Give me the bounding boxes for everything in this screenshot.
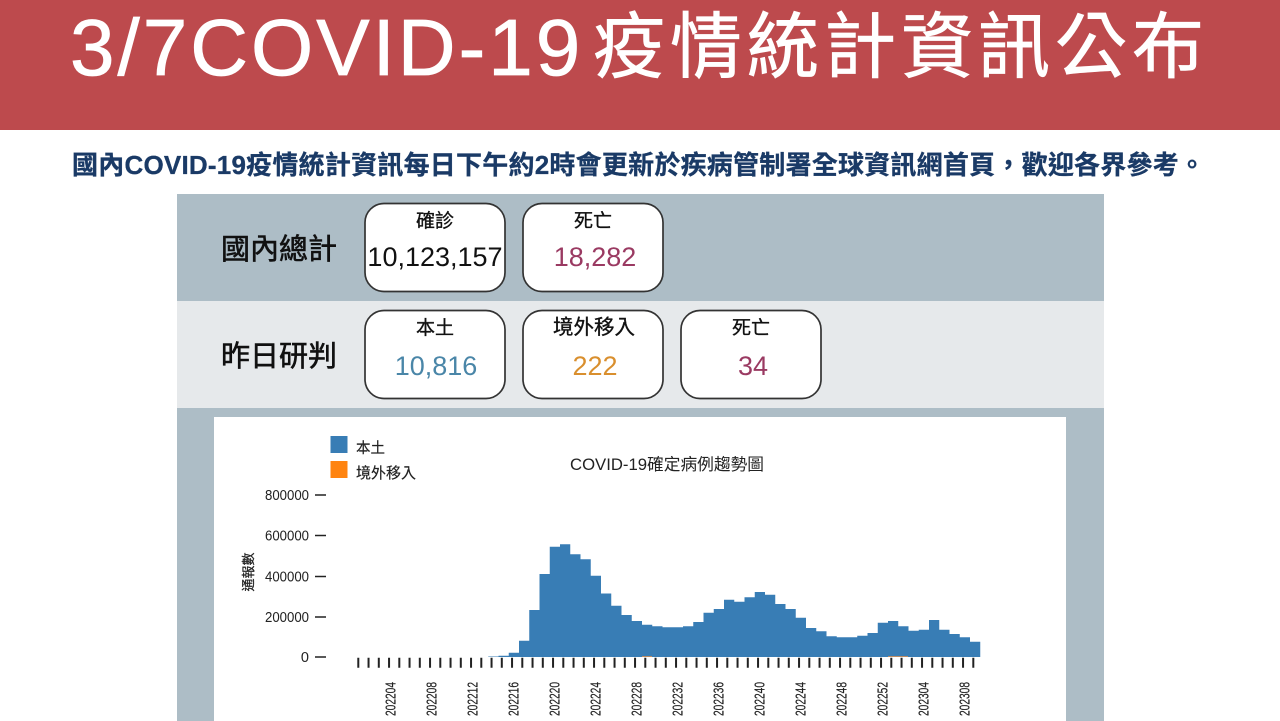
card: deaths total: 死亡 <box>574 210 612 232</box>
y axis: 200000 <box>265 610 309 626</box>
x axis labels: 202212 <box>464 682 482 716</box>
x axis labels: 202220 <box>546 682 564 716</box>
y axis: 800000 <box>265 488 309 504</box>
title: 3/7COVID-19 <box>70 3 583 92</box>
x axis labels: 202248 <box>834 682 850 716</box>
header banner <box>0 0 1280 130</box>
x axis labels: 202232 <box>670 682 686 716</box>
card: confirmed <box>365 204 505 292</box>
panel: trend chart <box>214 417 1066 721</box>
x axis labels: 202252 <box>874 682 892 716</box>
x axis labels: 202216 <box>506 682 522 716</box>
card: imported <box>523 310 663 398</box>
y axis <box>241 488 326 666</box>
card: deaths yesterday <box>681 310 821 398</box>
card: deaths yesterday: 34 <box>738 351 768 381</box>
card: deaths yesterday: 死亡 <box>732 317 770 339</box>
subtitle text: 國內COVID-19疫情統計資訊每日下午約2時會更新於疾病管制署全球資訊網首頁，歡迎各界參考。 <box>72 150 1205 180</box>
row: yesterday's determinations <box>177 301 1104 408</box>
x axis labels: 202308 <box>956 682 974 716</box>
card: deaths total <box>523 204 663 292</box>
card: domestic: 本土 <box>416 317 454 339</box>
x axis labels <box>382 682 974 716</box>
x axis labels: 202244 <box>792 682 810 716</box>
card: imported: 222 <box>572 351 618 381</box>
card: confirmed: 確診 <box>416 210 454 232</box>
row: national totals <box>177 194 1104 301</box>
card: deaths total: 18,282 <box>554 242 636 272</box>
card: domestic <box>365 310 505 398</box>
legend: 境外移入 <box>356 464 416 482</box>
card: domestic: 10,816 <box>395 351 477 381</box>
x axis labels: 202224 <box>588 682 604 716</box>
stacked area bars <box>488 544 980 657</box>
x axis ticks <box>357 658 975 668</box>
y axis: 400000 <box>265 570 309 586</box>
row heading: national totals: 國內總計 <box>221 233 337 266</box>
card: imported: 境外移入 <box>553 316 635 339</box>
row heading: yesterday: 昨日研判 <box>221 340 337 373</box>
x axis labels: 202236 <box>710 682 728 716</box>
card: confirmed: 10,123,157 <box>367 242 503 272</box>
y axis title: 通報數 <box>241 552 256 592</box>
x axis labels: 202304 <box>916 682 932 716</box>
legend <box>330 436 416 482</box>
y axis: 600000 <box>265 528 309 544</box>
legend: 本土 <box>356 440 385 457</box>
x axis labels: 202204 <box>382 682 400 716</box>
x axis labels: 202228 <box>628 682 646 716</box>
title: 疫情統計資訊公布 <box>593 8 1209 88</box>
y axis: 0 <box>301 650 309 666</box>
panel: statistics dashboard <box>177 194 1104 721</box>
x axis labels: 202208 <box>424 682 440 716</box>
chart title: COVID-19確定病例趨勢圖 <box>570 455 764 474</box>
x axis labels: 202240 <box>752 682 768 716</box>
imported cases slivers <box>642 656 908 658</box>
